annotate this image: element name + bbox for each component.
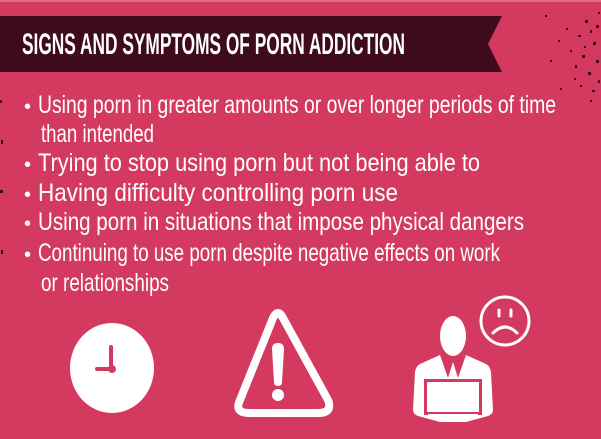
bullet list: •: [24, 154, 31, 176]
bullet list: Trying to stop using porn but not being able to: [38, 149, 480, 177]
bullet list: Having difficulty controlling porn use: [38, 179, 398, 207]
title banner: [0, 16, 502, 72]
icon: warning triangle: [238, 313, 329, 413]
icon: person at laptop: [413, 316, 493, 422]
bullet list: •: [24, 184, 31, 206]
bullet list: [24, 91, 556, 297]
icon: sad face: [481, 297, 529, 345]
icon: clock: [70, 323, 154, 413]
bullet list: •: [24, 244, 31, 266]
bullet list: •: [24, 213, 31, 235]
bullet list: or relationships: [41, 269, 169, 297]
bullet list: than intended: [41, 120, 154, 148]
bullet list: •: [24, 96, 31, 118]
